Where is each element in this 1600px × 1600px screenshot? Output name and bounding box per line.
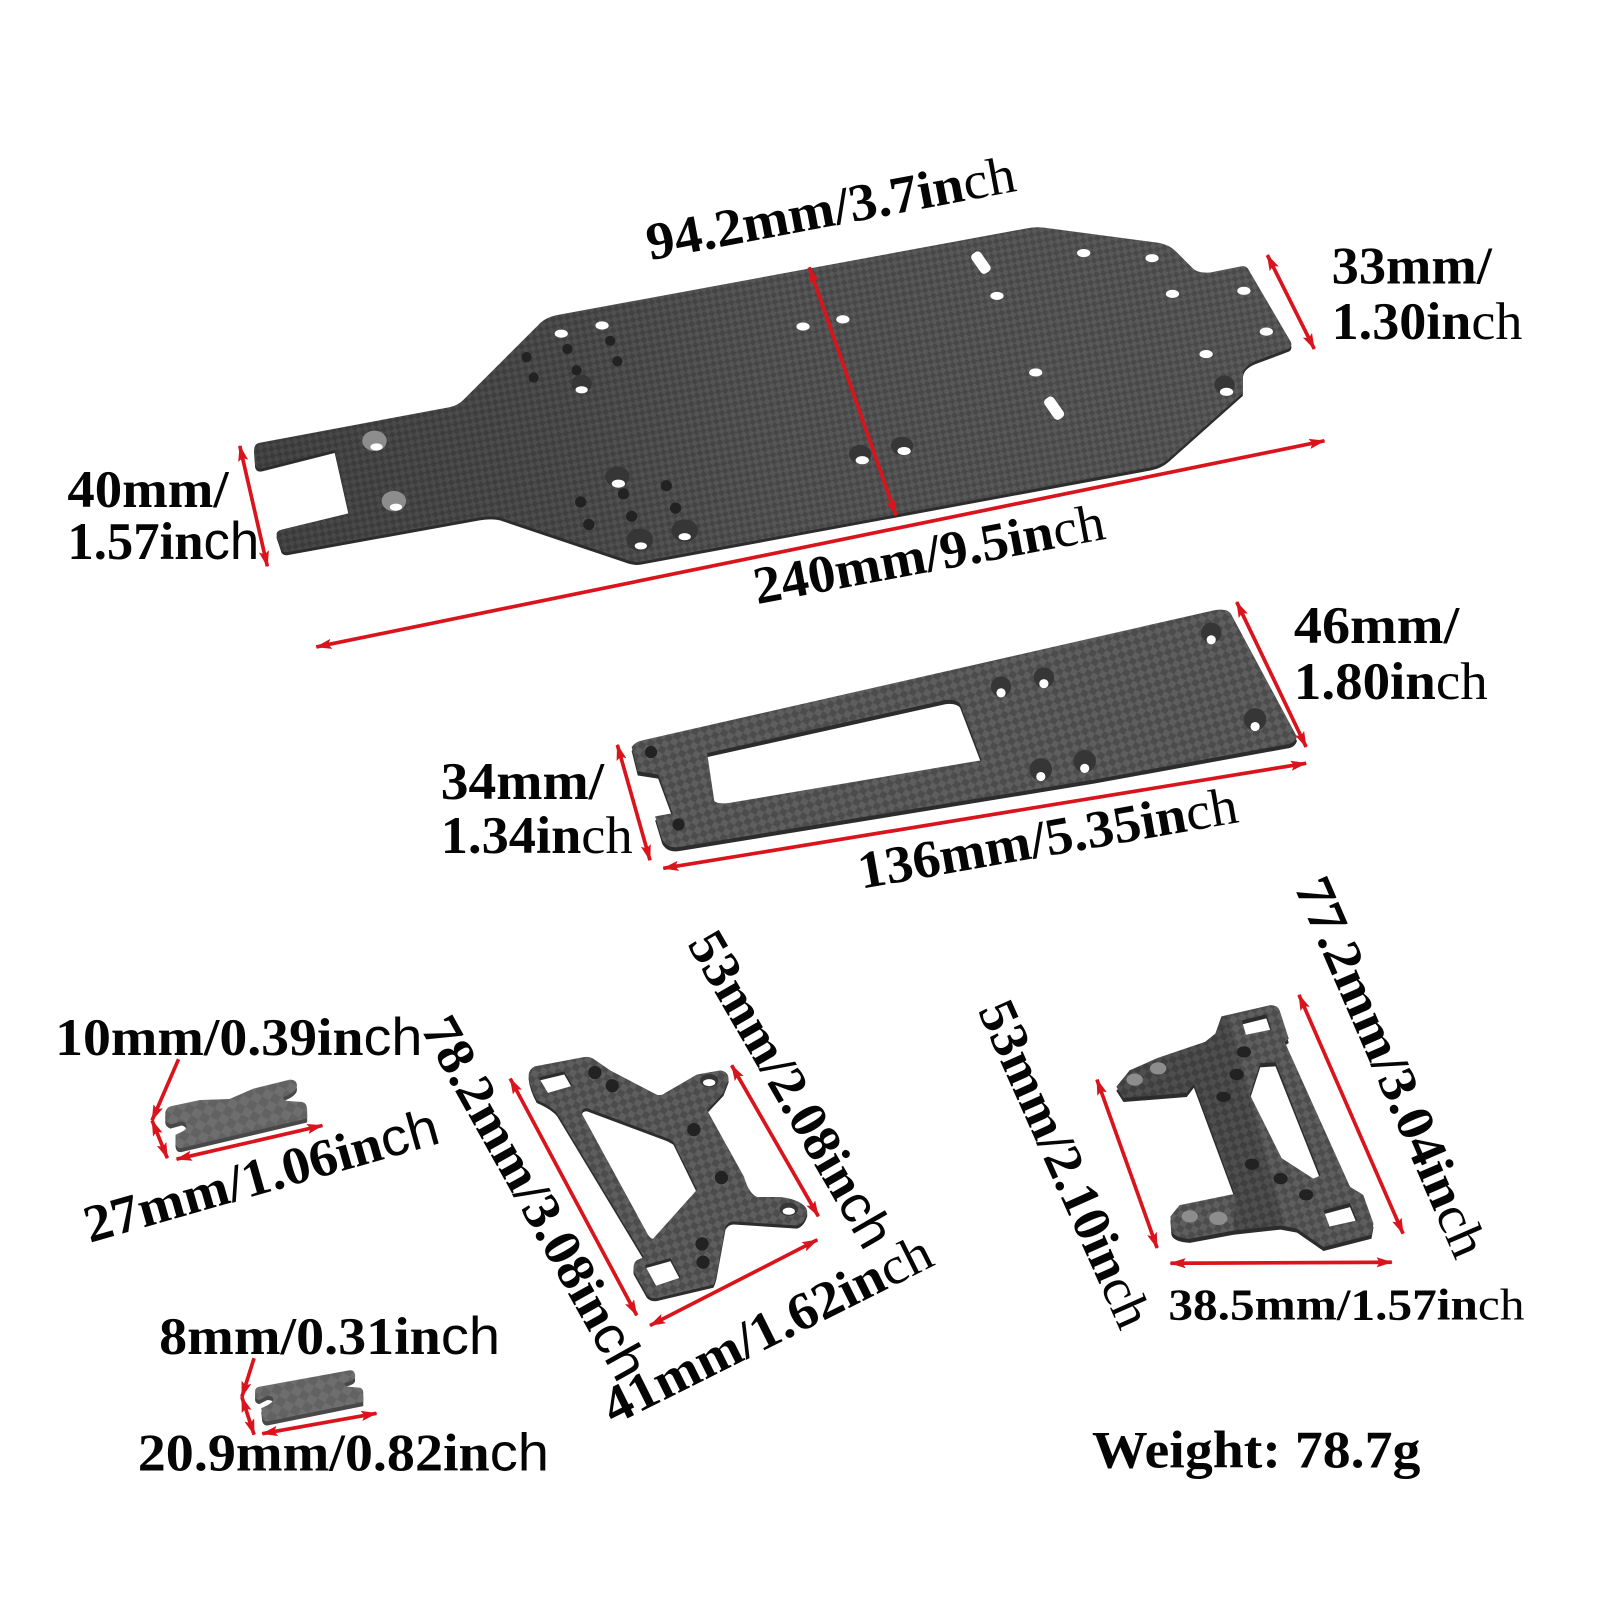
- arrow: plate length 240mm: [316, 441, 1324, 647]
- label: 46mm: 1.80inch: [1294, 653, 1488, 711]
- arrow: 34mm: [617, 745, 650, 860]
- second plate: [632, 610, 1297, 851]
- label: 34mm: 1.34inch: [441, 807, 633, 865]
- label: 46mm: 46mm/: [1294, 597, 1461, 655]
- main chassis plate: [254, 227, 1291, 565]
- label: 40mm: 40mm/: [67, 461, 230, 519]
- arrow: front width 33mm: [1267, 255, 1314, 349]
- arrows: 8mm: [242, 1358, 254, 1435]
- label: 40mm: [67, 461, 259, 571]
- second plate holes: [645, 622, 1266, 831]
- small spacer plate 20.9mm: [255, 1370, 363, 1426]
- label: 53mm/2.08inch: 53mm/2.08inch: [676, 920, 905, 1258]
- label: 240mm: 240mm/9.5inch: [749, 493, 1109, 616]
- label: 27mm: 27mm/1.06inch: [77, 1097, 445, 1254]
- label: 33mm: 1.30inch: [1332, 293, 1522, 351]
- label: 41mm: 41mm/1.62inch: [593, 1223, 942, 1436]
- arrow: 27mm: [177, 1126, 322, 1159]
- label: 34mm: [441, 753, 633, 865]
- label: weight: Weight: 78.7g: [1092, 1421, 1420, 1479]
- arrow: 78.2mm: [510, 1079, 637, 1315]
- arrows: 10mm: [152, 1059, 179, 1158]
- small spacer plate 27mm: [165, 1080, 307, 1152]
- label: 77.2mm: 77.2mm/3.04inch: [1283, 868, 1498, 1266]
- bent bracket plate: [1116, 1005, 1373, 1251]
- label: 53mm/2.10inch: 53mm/2.10inch: [967, 991, 1163, 1337]
- label: 10mm: 10mm/0.39in ch: [55, 1008, 422, 1067]
- label: 8mm: 8mm/0.31in ch: [159, 1307, 500, 1366]
- bracket holes: [1127, 1046, 1313, 1225]
- arrow: 46mm: [1237, 602, 1306, 747]
- arrow: 77.2mm: [1299, 995, 1403, 1234]
- label: 34mm: 34mm/: [441, 753, 605, 811]
- arrow: rear width 40mm: [240, 446, 267, 566]
- label: 94.2mm: 94.2mm/3.7inch: [641, 145, 1020, 272]
- label: 20.9mm: 20.9mm/0.82in ch: [138, 1423, 549, 1482]
- label: 38.5mm: 38.5mm/1.57in ch: [1168, 1279, 1524, 1329]
- label: 78.2mm: 78.2mm/3.08inch: [410, 1006, 659, 1390]
- arrow: plate width 94.2mm: [809, 267, 896, 515]
- label: 136mm: 136mm/5.35inch: [853, 777, 1242, 901]
- shock tower holes: [588, 1066, 798, 1269]
- label: 40mm: 1.57inch: [67, 512, 259, 571]
- label: 46mm: [1294, 597, 1488, 711]
- arrow: 53mm/2.10inch: [1097, 1080, 1157, 1248]
- bracket bend shading: [1116, 1015, 1284, 1231]
- arrow: 41mm: [650, 1240, 817, 1326]
- arrow: 53mm: [732, 1065, 818, 1216]
- main plate holes: [362, 249, 1273, 551]
- arrow: 38.5mm: [1170, 1262, 1392, 1263]
- label: 33mm: [1332, 238, 1522, 351]
- arrow: 20.9mm: [262, 1413, 377, 1434]
- shock tower plate: [529, 1057, 807, 1301]
- label: 33mm: 33mm/: [1332, 238, 1493, 296]
- arrow: 136mm: [663, 763, 1306, 868]
